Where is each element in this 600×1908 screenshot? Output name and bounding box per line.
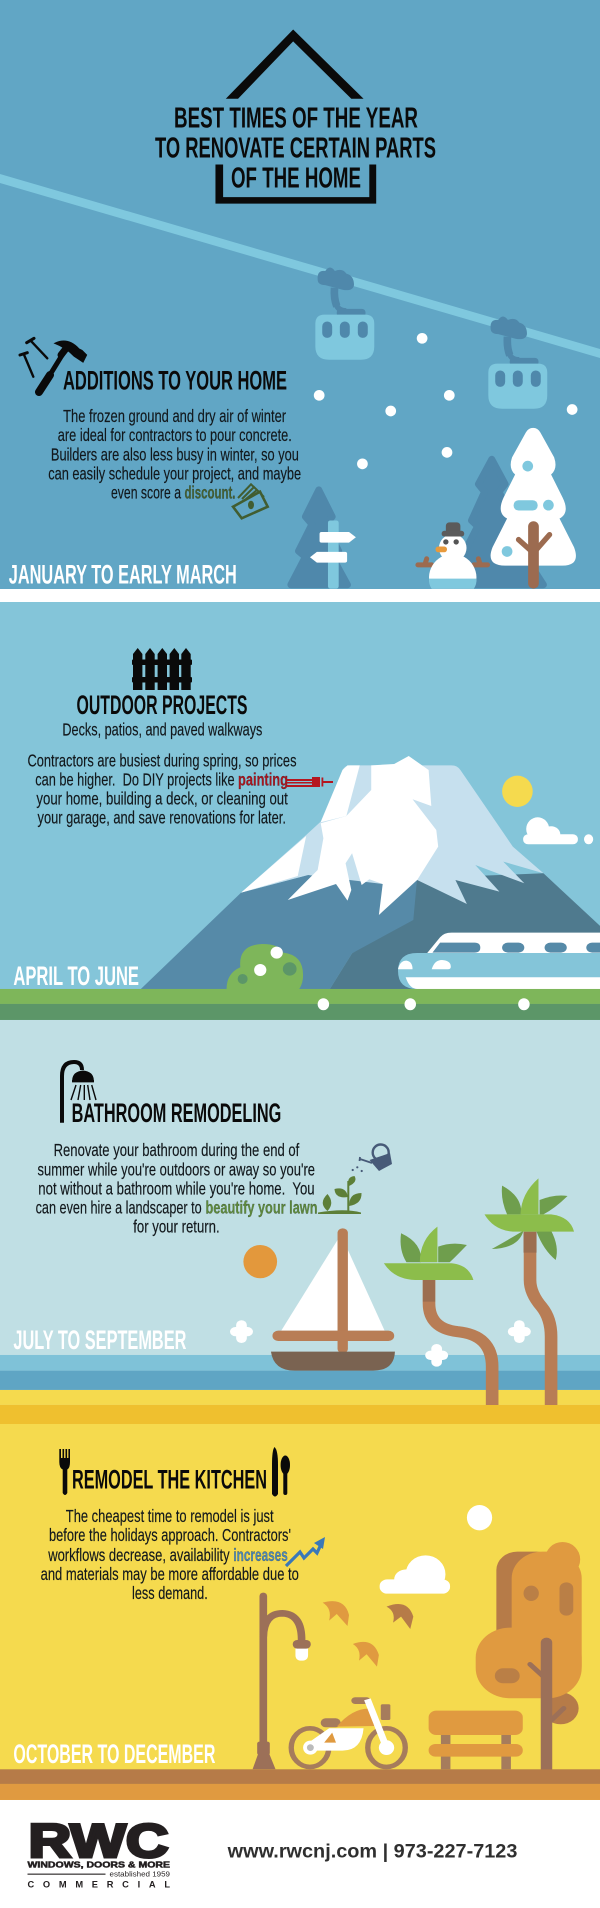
text block: bathroom [36,1140,317,1236]
month label: October to December: OCTOBER TO DECEMBER [13,1739,215,1769]
heading: additions to your home: ADDITIONS TO YOUR HOME [63,366,287,396]
moon [467,1505,492,1530]
text block: kitchen: and materials may be more affordable due to [41,1564,299,1584]
text block: additions: The frozen ground and dry air of winter [63,406,286,426]
icon: watering can [352,1144,392,1172]
text block: additions: Builders are also less busy in winter, so you [51,444,299,464]
water and sand bands [0,1355,600,1424]
beach scene [0,1178,600,1424]
icon: plant [318,1176,362,1214]
cloud [523,817,593,844]
text block: additions: are ideal for contractors to pour concrete. [58,425,292,445]
autumn tree [476,1542,582,1769]
text block: bathroom: not without a bathroom while you're home. You [38,1178,315,1198]
mountain [141,756,600,989]
train [398,933,600,989]
falling leaves [323,1601,413,1667]
heading: remodel the kitchen: REMODEL THE KITCHEN [72,1465,267,1495]
icon: rising arrow [286,1537,325,1566]
month label: January to early March: JANUARY TO EARLY MARCH [9,560,237,590]
icon: fork [59,1449,70,1495]
signpost [310,520,356,589]
text block: additions: discount. [184,483,236,503]
palm tree right [484,1178,574,1405]
title [155,102,436,194]
icon: shower [62,1062,96,1123]
street lamp [253,1593,311,1769]
logo: RWC: RWC [28,1814,168,1867]
icon: fence [132,648,192,690]
text block: outdoor projects: your home, building a deck, or cleaning out [36,789,288,809]
text block: outdoor projects [28,751,297,828]
month label: April to June: APRIL TO JUNE [13,961,139,991]
subheading: decks: Decks, patios, and paved walkways [62,720,263,740]
text block: outdoor projects: can be higher. Do DIY projects like [35,770,235,790]
text block: bathroom: Renovate your bathroom during the end of [54,1140,299,1160]
text block: kitchen: workflows decrease, availability [47,1545,230,1565]
logo: RWC: WINDOWS, DOORS & MORE [28,1859,170,1869]
autumn park scene [0,1505,600,1800]
cable [0,174,600,358]
gondola right [488,316,547,409]
bush [227,944,303,989]
snowman [418,522,488,589]
ground [0,1769,600,1800]
logo: RWC: COMMERCIAL [28,1880,170,1890]
snow dots [314,333,577,469]
title: TO RENOVATE CERTAIN PARTS [155,133,436,165]
sailboat [271,1228,395,1371]
title house outline [215,29,376,204]
contact details: www.rwcnj.com | 973-227-7123 [227,1841,518,1863]
sun [502,776,533,807]
title: OF THE HOME [231,162,361,194]
pine tree left [291,490,347,585]
text block: kitchen: before the holidays approach. Contractors' [49,1525,291,1545]
panel: April to June [0,602,600,1020]
text block: outdoor projects: Contractors are busiest during spring, so prices [28,751,297,771]
heading: outdoor projects: OUTDOOR PROJECTS [76,690,248,720]
text block: kitchen [41,1506,299,1603]
text block: kitchen: less demand. [132,1583,208,1603]
motorcycle [291,1697,405,1767]
text block: kitchen: increases [233,1545,288,1565]
icon: hammer and nails [20,338,86,392]
logo: RWC [28,1814,170,1890]
text block: outdoor projects: your garage, and save renovations for later. [38,808,286,828]
footer [28,1814,518,1890]
mountain and train scene [0,756,600,1020]
icon: cash [233,484,268,518]
text block: bathroom: beautify your lawn [206,1197,318,1217]
panel: July to September [0,1020,600,1424]
snowy tree [491,428,576,589]
title: BEST TIMES OF THE YEAR [174,102,418,134]
logo: RWC: established 1959 [110,1872,170,1879]
text block: kitchen: The cheapest time to remodel is just [66,1506,274,1526]
palm tree left [384,1227,492,1405]
text block: bathroom: for your return. [133,1216,220,1236]
text block: outdoor projects: painting [238,770,288,790]
text block: additions: even score a [111,483,181,503]
gondola illustrations [291,268,577,589]
text block: additions [48,406,301,503]
gondola left [315,268,374,360]
month label: July to September: JULY TO SEPTEMBER [13,1325,186,1355]
text block: bathroom: summer while you're outdoors or away so you're [38,1159,315,1179]
icon: paintbrush [287,777,333,787]
icon: knife and spoon [272,1447,290,1496]
ground [0,989,600,1020]
pine tree right [448,459,543,585]
sun [243,1245,277,1278]
panel: October to December [0,1424,600,1800]
heading: bathroom remodeling: BATHROOM REMODELING [72,1098,281,1128]
text block: additions: can easily schedule your project, and maybe [48,464,301,484]
bench [429,1711,523,1769]
panel: January to early March [0,0,600,590]
sparkles [230,1320,531,1367]
cloud [380,1555,450,1594]
text block: bathroom: can even hire a landscaper to [36,1197,202,1217]
